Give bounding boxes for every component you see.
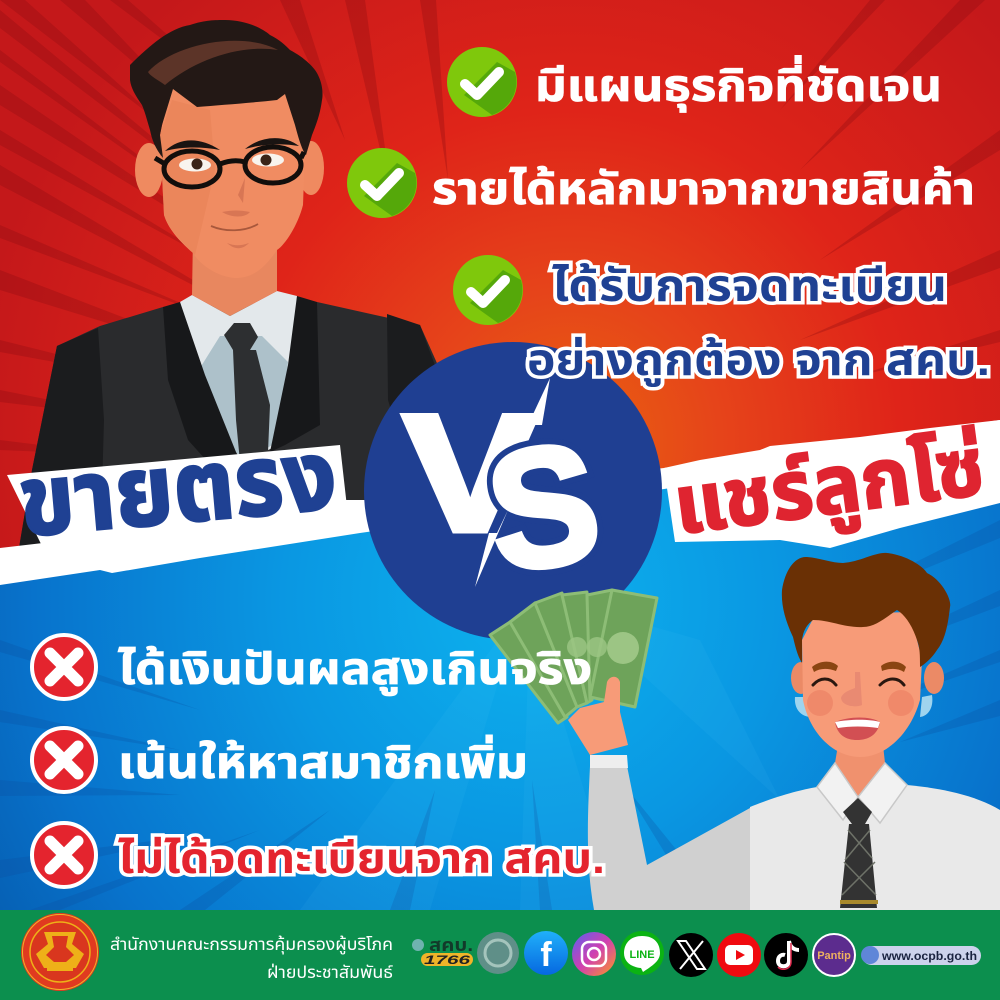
text: ได้รับการจดทะเบียน: ได้รับการจดทะเบียน: [552, 262, 947, 311]
website pill: [861, 946, 981, 965]
icon: round logo: [477, 932, 519, 974]
icon: hotline 1766: [412, 935, 473, 967]
neck: [835, 745, 885, 797]
icon: pantip: [813, 934, 855, 976]
lapels: [163, 296, 320, 470]
V letter: V: [404, 381, 536, 565]
teeth: [835, 720, 880, 728]
face: [160, 88, 305, 278]
eyebrows: [812, 662, 906, 672]
text: รายได้หลักมาจากขายสินค้า: รายได้หลักมาจากขายสินค้า: [432, 165, 975, 214]
text: department: ฝ่ายประชาสัมพันธ์: [267, 963, 393, 982]
icon: OCPB seal: [21, 913, 99, 991]
illustration: businessman in suit: [17, 20, 440, 560]
icon: cross 1: [32, 635, 96, 699]
cuff: [590, 755, 628, 768]
face: [802, 612, 922, 757]
white brush stripe: [0, 420, 1000, 600]
illustration: man holding money: [490, 553, 1000, 910]
glasses: [155, 147, 304, 187]
cheeks: [807, 690, 914, 716]
nose and mouth: [222, 178, 250, 216]
S letter: S: [477, 406, 610, 608]
text: agency name: สำนักงานคณะกรรมการคุ้มครองผู้บริโภค: [110, 934, 393, 956]
text: ได้เงินปันผลสูงเกินจริง: ได้เงินปันผลสูงเกินจริง: [118, 645, 592, 696]
nose: [841, 672, 862, 706]
neck: [192, 235, 277, 316]
tie clip: [840, 900, 878, 904]
text: อย่างถูกต้อง จาก สคบ.: อย่างถูกต้อง จาก สคบ.: [527, 336, 990, 387]
shirt shadow: [200, 336, 288, 462]
ears: [135, 143, 163, 197]
icon: facebook: f: [540, 936, 552, 974]
face shade: [160, 100, 215, 255]
S gap: S: [477, 406, 610, 608]
hair: [130, 20, 323, 158]
tie: [224, 323, 270, 462]
website pill: www.ocpb.go.th: [881, 949, 977, 963]
panel: blue background with burst: [0, 440, 1000, 910]
hair: [782, 553, 950, 667]
money fan: [490, 590, 657, 723]
text: เน้นให้หาสมาชิกเพิ่ม: เน้นให้หาสมาชิกเพิ่ม: [118, 735, 528, 788]
eyes: [179, 154, 284, 172]
label: ขายตรง: ขายตรง: [14, 420, 341, 557]
smiling eyes: [813, 679, 904, 685]
icon: check 1: [447, 47, 517, 117]
lightning bolt upper: [528, 378, 550, 425]
icon: instagram: [572, 932, 616, 976]
light blue side shapes: [795, 695, 932, 717]
tie: [840, 798, 877, 908]
icon: tiktok: [764, 933, 808, 977]
banknote circles: [567, 632, 639, 664]
icon: line: LINE: [629, 949, 655, 961]
icon: X: [669, 933, 713, 977]
ears: [791, 662, 811, 694]
panel: footer bar: [0, 910, 1000, 1000]
text: ไม่ได้จดทะเบียนจาก สคบ.: ไม่ได้จดทะเบียนจาก สคบ.: [118, 835, 605, 883]
label: แชร์ลูกโซ่: แชร์ลูกโซ่: [668, 421, 990, 556]
jacket: [17, 302, 440, 560]
mouth: [835, 718, 880, 740]
icon: cross 3: [32, 823, 96, 887]
hand: [568, 677, 628, 755]
icon: hotline 1766: สคบ.: [429, 935, 473, 955]
shirt body: [750, 785, 1000, 910]
icon: pantip: Pantip: [817, 950, 851, 962]
tie pattern: [842, 830, 876, 895]
collar: [817, 763, 907, 823]
jacket dark side panels: [17, 314, 436, 560]
eyebrows: [165, 138, 299, 151]
panel: red background with burst: [0, 0, 1000, 620]
hair highlight: [148, 41, 278, 85]
lightning bolt lower: [475, 510, 508, 587]
icon: hotline 1766: 1766: [424, 953, 471, 967]
icon: youtube: [717, 933, 761, 977]
text: มีแผนธุรกิจที่ชัดเจน: มีแผนธุรกิจที่ชัดเจน: [535, 55, 942, 113]
icon: check 2: [347, 148, 417, 218]
icon: line: [620, 931, 664, 975]
VS badge: [364, 342, 662, 640]
shirt: [180, 291, 297, 462]
icon: check 3: [453, 255, 523, 325]
icon: cross 2: [32, 728, 96, 792]
sleeve: [588, 766, 750, 910]
icon: facebook: [524, 931, 568, 975]
